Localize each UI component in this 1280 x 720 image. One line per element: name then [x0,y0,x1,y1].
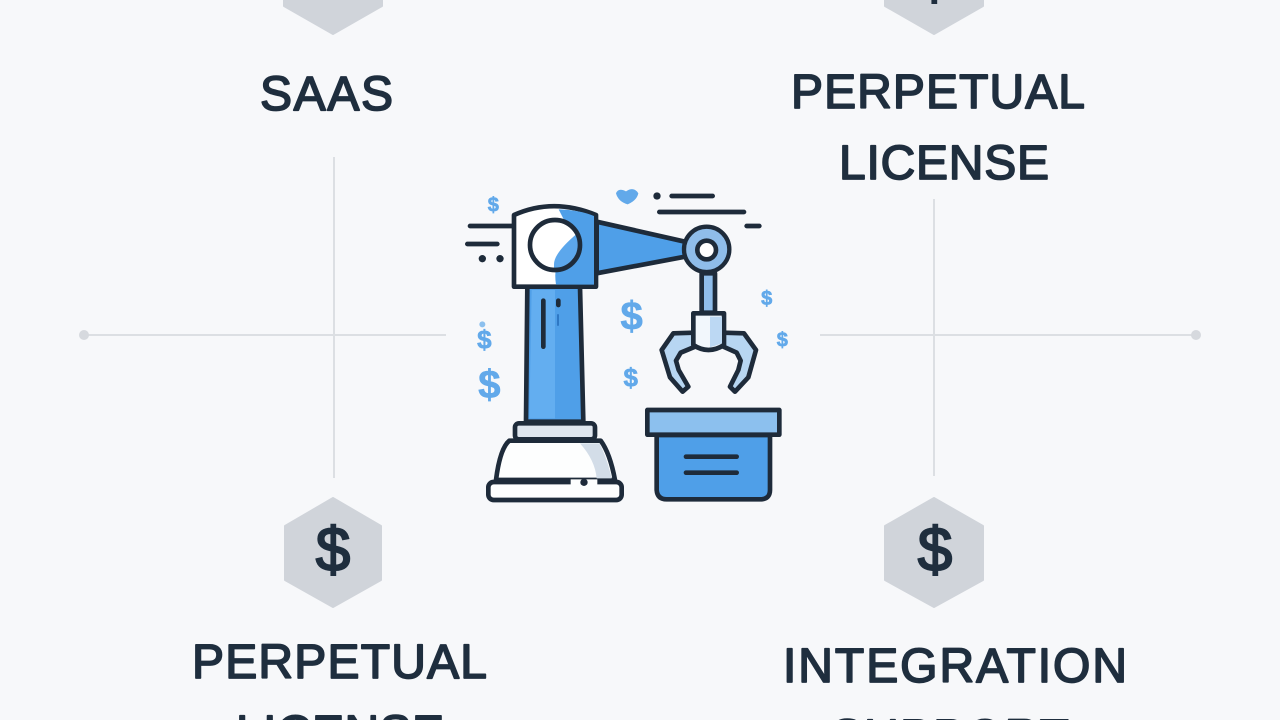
floating dollar signs: $ [761,288,772,310]
heading: perpetual license top right: LICENSE [839,137,1049,190]
robot column [526,287,583,422]
icon: bottom right hexagon dollar: $ [918,516,952,585]
icon: top left hexagon dollar [284,0,382,34]
heading: integration support [783,640,1127,720]
heading: perpetual license bottom left: PERPETUAL [192,636,487,689]
heading: perpetual license top right: PERPETUAL [791,66,1085,119]
floating dollar signs: $ [488,194,499,216]
floating dollar signs: $ [623,363,638,393]
heading: integration support: INTEGRATION [783,640,1127,693]
icon: top right hexagon dollar [885,0,983,34]
floating dollar signs: $ [777,330,788,352]
icon: bottom right hexagon dollar [885,498,983,607]
icon: robot arm with box [467,189,788,500]
floating dollar signs [477,189,788,407]
wrist stem [702,273,715,313]
heading: SaaS: SAAS [260,68,393,121]
robot arm beam [597,222,685,273]
box [647,410,779,499]
robot base [488,423,622,500]
floating dollar signs: $ [477,324,492,354]
gripper claws [662,313,756,392]
connector lines [79,157,1201,478]
heading: perpetual license bottom left [192,636,487,720]
heading: perpetual license top right [791,66,1085,190]
floating dollar signs: $ [478,363,500,407]
elbow joint [684,227,729,272]
floating dollar signs: $ [621,294,643,338]
icon: bottom left hexagon dollar [285,498,381,607]
icon: bottom left hexagon dollar: $ [316,516,350,585]
robot head [514,206,596,287]
motion lines [467,192,759,262]
